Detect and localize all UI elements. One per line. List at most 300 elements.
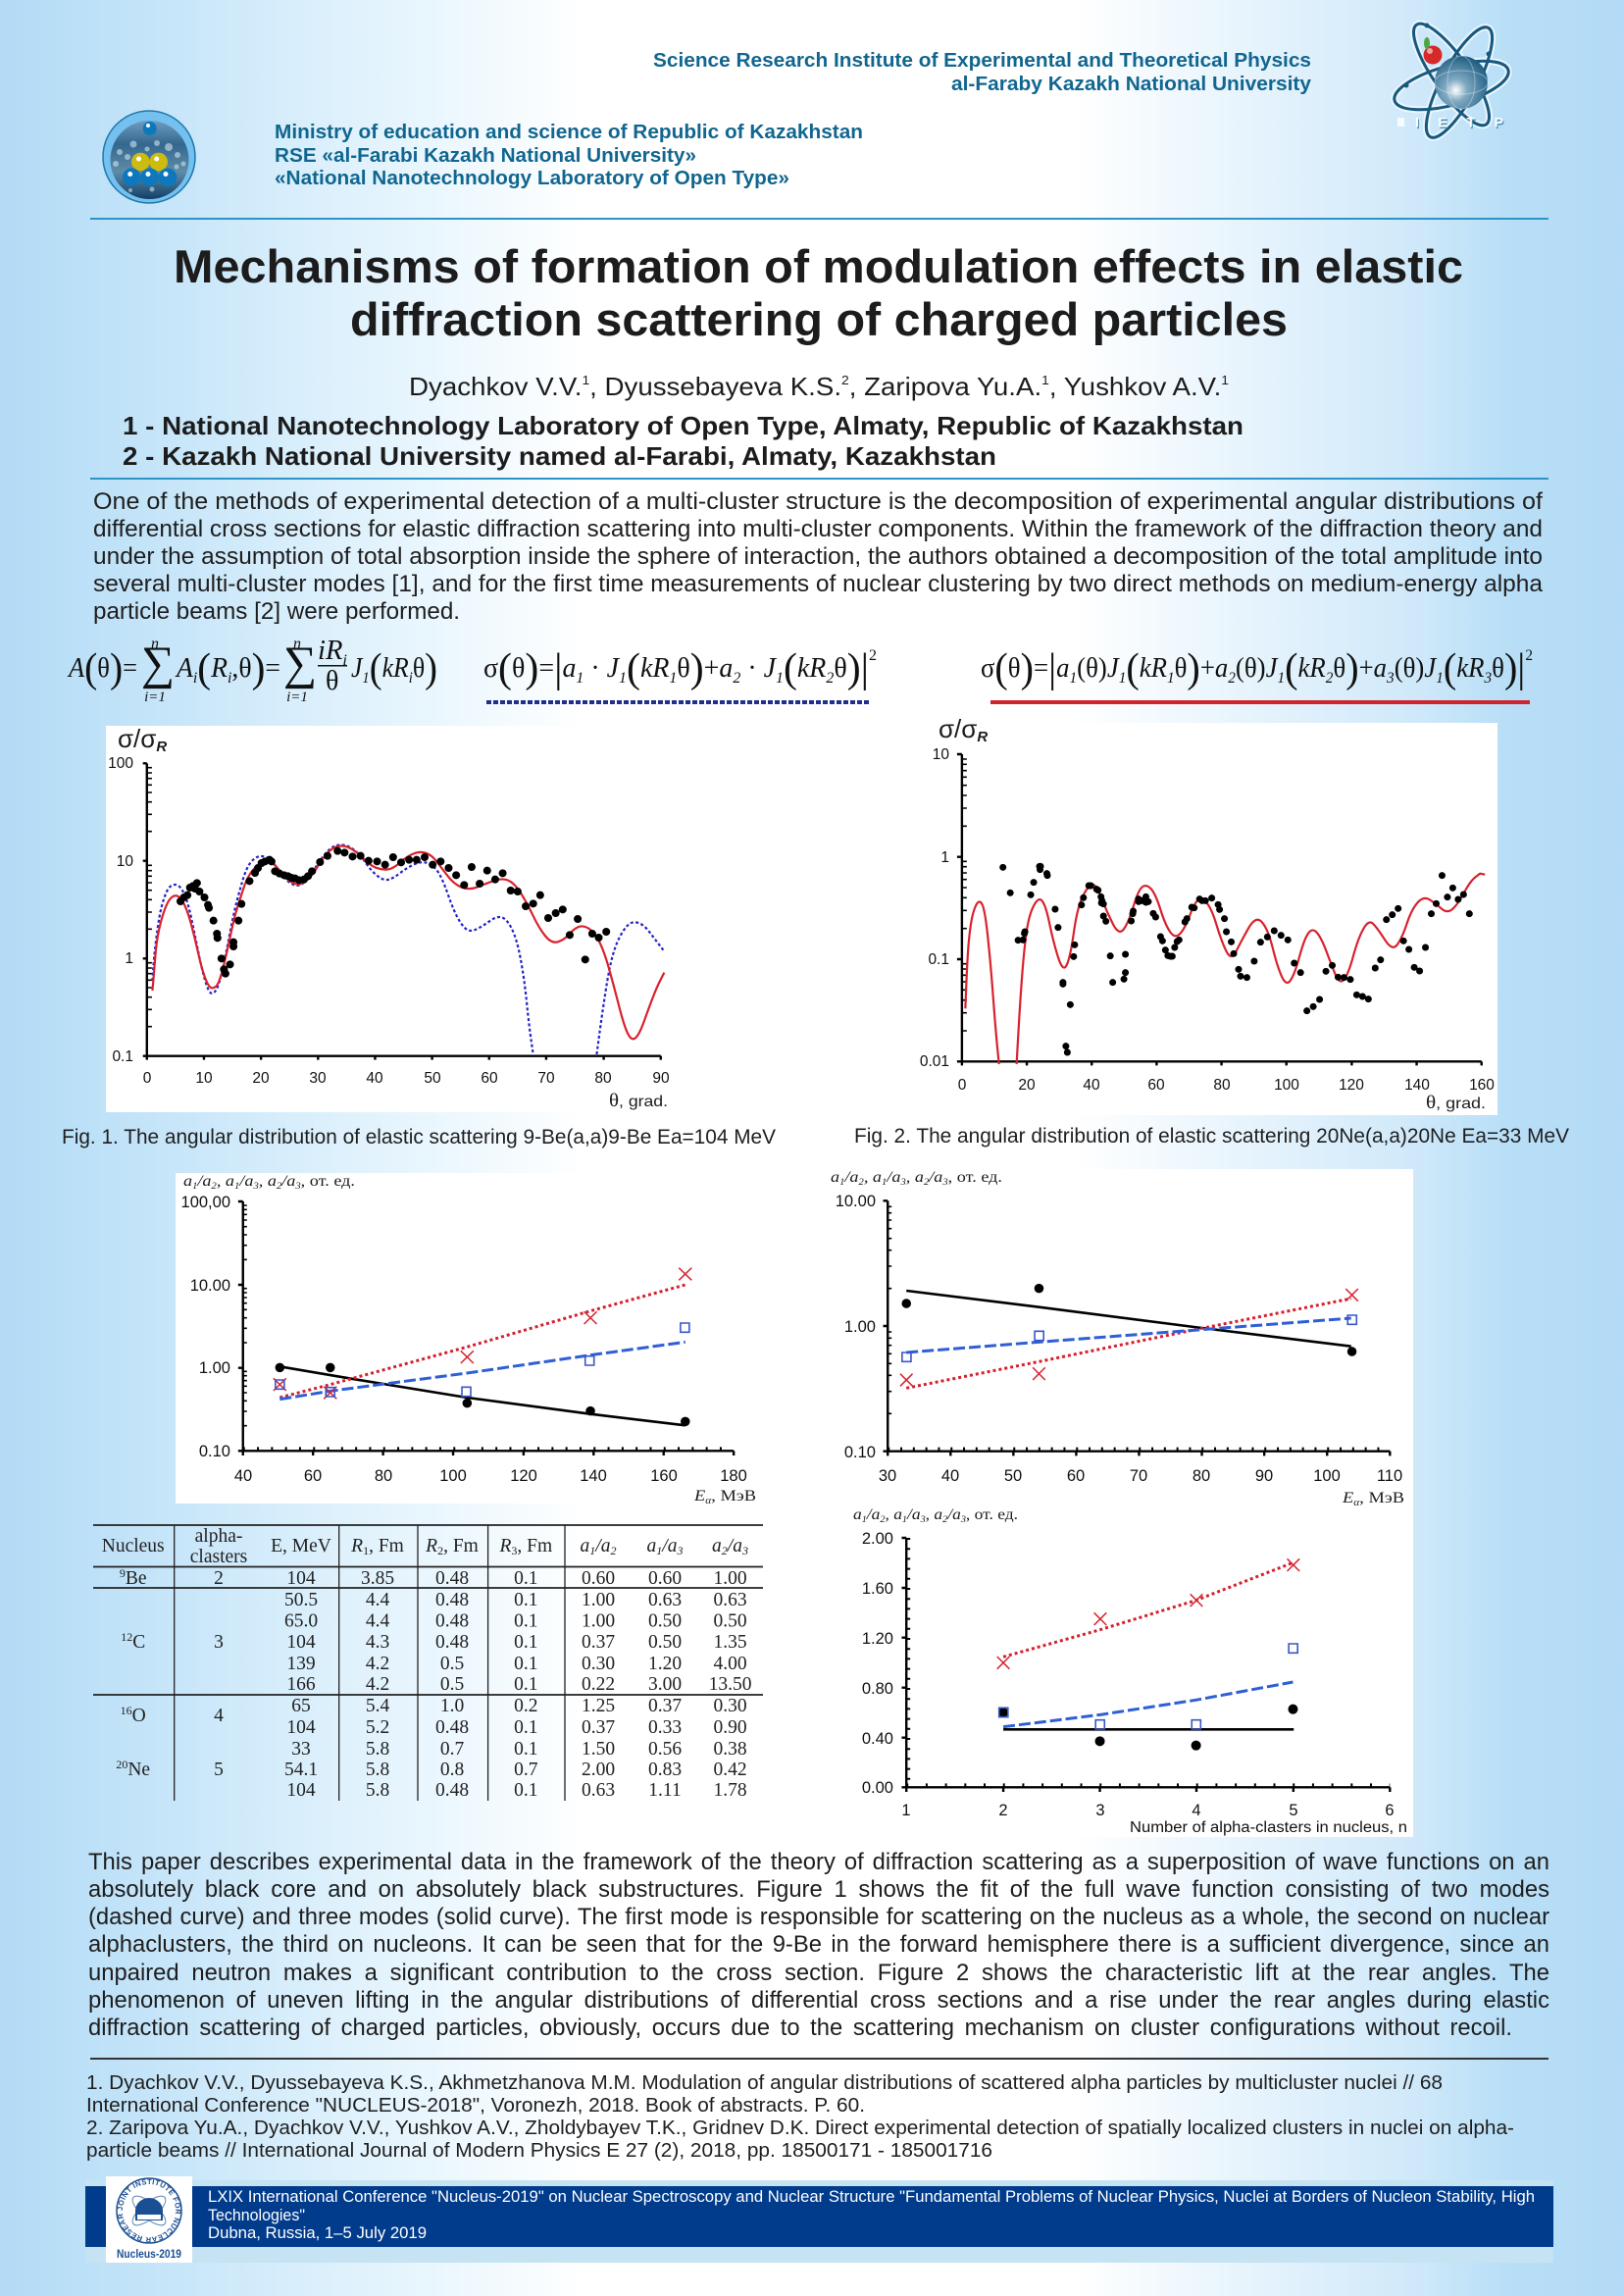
- intro paragraph: several multi-cluster modes [1], and for the first time measurements of nuclear clustering by two direct methods on medium-energy alpha: [93, 571, 1544, 597]
- table values: 0.30: [582, 1654, 615, 1674]
- chart: amplitude ratios vs number of alpha clusters: /a: [906, 1506, 921, 1523]
- table values: 0.50: [648, 1610, 682, 1632]
- formula: three-mode cross section: (θ): [1077, 653, 1107, 684]
- table values: 65: [291, 1696, 311, 1716]
- chart: figure 1 angular distribution 9-Be: θ, grad.: [609, 1091, 668, 1111]
- chart: amplitude ratios vs number of alpha clusters: 1: [901, 1802, 911, 1819]
- table header: alpha-: [195, 1526, 242, 1547]
- header: institute name: Science Research Institute of Experimental and Theoretical Physics: [653, 50, 1311, 72]
- chart: figure 2 angular distribution 20Ne: 0: [958, 1077, 967, 1094]
- table values: 1.00: [582, 1590, 615, 1610]
- formula: two-mode cross section: kR: [640, 653, 669, 684]
- discussion paragraph: diffraction scattering of charged particles, obviously, occurs due to the scattering mechanism on cluster configurations without recoil.: [88, 2015, 1512, 2041]
- caption: figure 1: Fig. 1. The angular distribution of elastic scattering 9-Be(a,a)9-Be Ea=104 MeV: [62, 1126, 776, 1148]
- formula: three-mode cross section: kR: [1140, 653, 1167, 684]
- header: institute name: [653, 50, 1312, 95]
- formula: two-mode cross section: a: [719, 653, 733, 684]
- chart: amplitude ratios vs energy, 12C: α: [705, 1496, 712, 1506]
- formula: three-mode cross section: 1: [1436, 670, 1444, 687]
- formula: three-mode cross section: 1: [1277, 670, 1285, 687]
- table header: 1: [656, 1544, 662, 1557]
- icon: Nucleus-2019 conference logo: [106, 2176, 192, 2263]
- table values: 4.4: [366, 1610, 389, 1632]
- chart: figure 1 angular distribution 9-Be: 10: [195, 1070, 213, 1087]
- table header: 3: [511, 1544, 517, 1557]
- formula: two-mode cross section: J: [607, 653, 621, 684]
- chart: amplitude ratios vs energy, 12C: 10.00: [190, 1277, 230, 1295]
- chart: amplitude ratios vs energy, 12C: , a: [259, 1173, 277, 1190]
- chart: amplitude ratios vs number of alpha clusters: a: [853, 1506, 861, 1523]
- formula: total amplitude: θ: [97, 653, 110, 684]
- formula: three-mode cross section: a: [1374, 653, 1387, 684]
- chart: amplitude ratios vs number of alpha clusters: /a: [866, 1506, 881, 1523]
- table nuclei labels: 4: [214, 1706, 224, 1726]
- chart: amplitude ratios vs energy, 12C: 140: [580, 1467, 607, 1485]
- intro paragraph: [93, 488, 1544, 625]
- chart: amplitude ratios vs energy, 20Ne: 90: [1255, 1467, 1273, 1485]
- intro paragraph: particle beams [2] were performed.: [93, 598, 460, 625]
- table values: 0.7: [440, 1739, 464, 1760]
- intro paragraph: differential cross sections for elastic diffraction scattering into multi-cluster components. Within the framework of the diffraction theory and: [93, 516, 1543, 542]
- discussion paragraph: phenomenon of uneven lifting in the angular distributions of differential cross sections and a rise under the rear angles during elastic: [88, 1987, 1549, 2014]
- formula: total amplitude: [67, 636, 437, 705]
- table header: 1: [589, 1544, 595, 1557]
- table values: 0.7: [514, 1760, 538, 1780]
- formula: total amplitude: kR: [382, 653, 409, 684]
- table values: 0.60: [582, 1568, 615, 1589]
- formula: two-mode cross section: 1: [669, 670, 677, 687]
- chart: amplitude ratios vs energy, 12C: 1.00: [199, 1359, 230, 1377]
- chart: amplitude ratios vs energy, 20Ne: 40: [941, 1467, 959, 1485]
- header: ministry and laboratory text: RSE «al-Farabi Kazakh National University»: [275, 145, 696, 167]
- table header: /a: [594, 1536, 611, 1556]
- chart: figure 1 angular distribution 9-Be: 20: [252, 1070, 270, 1087]
- chart: amplitude ratios vs number of alpha clusters: , от. ед.: [966, 1506, 1018, 1523]
- title: Mechanisms of formation of modulation effects in elastic: [174, 240, 1463, 292]
- chart: amplitude ratios vs energy, 20Ne: 2: [924, 1177, 930, 1187]
- chart: amplitude ratios vs energy, 20Ne: 110: [1377, 1467, 1402, 1485]
- intro paragraph: under the assumption of total absorption inside the sphere of interaction, the authors obtained a decomposition of the total amplitude into: [93, 543, 1543, 570]
- table values: 2.00: [582, 1760, 615, 1780]
- formula: three-mode cross section: σ: [981, 653, 994, 684]
- formula: three-mode cross section: 2: [1525, 647, 1533, 664]
- chart: amplitude ratios vs number of alpha clusters: 1.60: [862, 1580, 893, 1598]
- formula: three-mode cross section: 2: [1326, 670, 1333, 687]
- formula: three-mode cross section: a: [1215, 653, 1228, 684]
- chart: amplitude ratios vs number of alpha clusters: , a: [885, 1506, 902, 1523]
- formula: total amplitude: θ: [326, 666, 338, 696]
- icon: IETP atom logo: [1390, 15, 1513, 145]
- formula: three-mode cross section: ): [1345, 646, 1359, 691]
- references: particle beams // International Journal of Modern Physics E 27 (2), 2018, pp. 18500171 - 185001716: [86, 2140, 992, 2162]
- chart: amplitude ratios vs energy, 12C: /a: [280, 1173, 296, 1190]
- table header: E, MeV: [271, 1536, 331, 1556]
- table values: 0.63: [582, 1780, 615, 1801]
- authors: 2: [841, 373, 849, 387]
- formula: two-mode cross section: J: [764, 653, 778, 684]
- icon: Nucleus-2019 conference logo: Nucleus-2019: [117, 2247, 181, 2261]
- chart: amplitude ratios vs energy, 20Ne: /a: [886, 1169, 901, 1186]
- chart: figure 1 angular distribution 9-Be: 30: [309, 1070, 327, 1087]
- formula: three-mode cross section: a: [1056, 653, 1070, 684]
- chart: amplitude ratios vs number of alpha clusters: 2: [942, 1514, 948, 1524]
- authors: , Yushkov A.V.: [1049, 372, 1221, 401]
- chart: figure 2 angular distribution 20Ne: 0.1: [928, 951, 949, 968]
- chart: amplitude ratios vs energy, 20Ne: 1.00: [844, 1318, 876, 1336]
- table values: 0.5: [440, 1674, 464, 1695]
- formula: two-mode cross section: (: [627, 646, 640, 691]
- authors: 1: [1221, 373, 1229, 387]
- chart: amplitude ratios vs energy, 20Ne: a: [831, 1169, 838, 1186]
- table values: 4.00: [713, 1654, 747, 1674]
- table values: 139: [286, 1654, 316, 1674]
- chart: amplitude ratios vs number of alpha clusters: 0.80: [862, 1680, 893, 1698]
- footer conference text: [208, 2187, 1535, 2242]
- chart: amplitude ratios vs energy, 20Ne: 3: [899, 1177, 906, 1187]
- formula: three-mode cross section: 1: [1119, 670, 1126, 687]
- table values: 0.1: [514, 1590, 537, 1610]
- table values: 5.4: [366, 1696, 389, 1716]
- chart: amplitude ratios vs energy, 20Ne: /a: [928, 1169, 943, 1186]
- table nuclei labels: Ne: [127, 1760, 150, 1780]
- icon: IETP atom logo: IETP: [1416, 116, 1504, 131]
- table nuclei labels: [116, 1566, 224, 1780]
- table values: 1.00: [713, 1568, 747, 1589]
- table values: 104: [286, 1780, 316, 1801]
- formula: two-mode cross section: ): [690, 646, 704, 691]
- table values: 4.4: [366, 1590, 389, 1610]
- table header: /a: [727, 1536, 742, 1556]
- chart: amplitude ratios vs energy, 12C: /a: [196, 1173, 212, 1190]
- formula: two-mode cross section: (: [784, 646, 797, 691]
- table header: R: [350, 1536, 363, 1556]
- table header: 2: [610, 1544, 616, 1557]
- chart: amplitude ratios vs number of alpha clusters: 1.20: [862, 1630, 893, 1648]
- table values: 0.50: [713, 1610, 747, 1632]
- table nuclei labels: 20: [116, 1758, 127, 1771]
- chart: figure 1 angular distribution 9-Be: σ/σ: [118, 724, 156, 753]
- chart: figure 2 angular distribution 20Ne: 140: [1404, 1077, 1430, 1094]
- table values: 5.2: [366, 1717, 389, 1738]
- chart: amplitude ratios vs number of alpha clusters: 3: [1095, 1802, 1105, 1819]
- chart: figure 2 angular distribution 20Ne: R: [977, 729, 988, 745]
- table values: 0.1: [514, 1739, 537, 1760]
- chart: amplitude ratios vs energy, 20Ne: 70: [1130, 1467, 1147, 1485]
- formula: three-mode cross section: (θ): [1236, 653, 1266, 684]
- formula: three-mode cross section: ): [1187, 646, 1200, 691]
- chart: amplitude ratios vs number of alpha clusters: 3: [960, 1514, 966, 1524]
- table values: 0.48: [435, 1590, 469, 1610]
- chart: figure 2 angular distribution 20Ne: 10: [933, 746, 949, 763]
- chart: amplitude ratios vs number of alpha clusters: 1: [902, 1514, 907, 1524]
- footer conference text: Technologies": [208, 2206, 305, 2224]
- table values: 1.35: [713, 1632, 747, 1653]
- table values: 0.63: [713, 1590, 747, 1610]
- table values: 0.8: [440, 1760, 464, 1780]
- references: [86, 2072, 1514, 2162]
- table values: 5.8: [366, 1760, 389, 1780]
- formula: two-mode cross section: θ: [834, 653, 847, 684]
- formula: two-mode cross section: )|: [847, 646, 869, 691]
- formula: total amplitude: i: [409, 670, 413, 687]
- chart: amplitude ratios vs number of alpha clusters: 0.00: [862, 1779, 893, 1797]
- formula: three-mode cross section: (: [1444, 646, 1456, 691]
- formula: three-mode cross section: θ: [1008, 653, 1021, 684]
- chart: amplitude ratios vs energy, 20Ne: 50: [1004, 1467, 1022, 1485]
- table values: 0.1: [514, 1717, 537, 1738]
- table values: 0.30: [713, 1696, 747, 1716]
- footer conference text: LXIX International Conference "Nucleus-2019" on Nuclear Spectroscopy and Nuclear Structure "Fundamental Problems of Nuclear Physics, Nuclei at Borders of Nucleon Stability, High: [208, 2187, 1535, 2206]
- formula: total amplitude: 1: [362, 670, 370, 687]
- table nuclei labels: O: [132, 1706, 146, 1726]
- chart: amplitude ratios vs number of alpha clusters: 1: [862, 1514, 867, 1524]
- authors: 1: [582, 373, 589, 387]
- formula: total amplitude: R: [210, 653, 228, 684]
- formula: total amplitude: (: [197, 646, 211, 691]
- formula: total amplitude: (: [84, 646, 97, 691]
- chart: amplitude ratios vs energy, 20Ne: 100: [1313, 1467, 1341, 1485]
- formula: total amplitude: i: [193, 670, 197, 687]
- chart: amplitude ratios vs energy, 12C: 120: [510, 1467, 537, 1485]
- header: ministry and laboratory text: [275, 122, 863, 189]
- formula: total amplitude: ∑: [283, 638, 317, 689]
- table values: 0.50: [648, 1632, 682, 1653]
- chart: amplitude ratios vs energy, 12C: 2: [277, 1181, 282, 1191]
- formula: three-mode cross section: 3: [1484, 670, 1492, 687]
- table values: 13.50: [709, 1674, 751, 1695]
- references: 2. Zaripova Yu.A., Dyachkov V.V., Yushkov A.V., Zholdybayev T.K., Gridnev D.K. Direct experimental detection of spatially localized clusters in nuclei on alpha-: [86, 2117, 1514, 2139]
- table values: 166: [286, 1674, 316, 1695]
- table values: 1.25: [582, 1696, 615, 1716]
- chart: amplitude ratios vs energy, 20Ne: 60: [1067, 1467, 1085, 1485]
- table values: 0.38: [713, 1739, 747, 1760]
- chart: amplitude ratios vs energy, 20Ne: , МэВ: [1359, 1490, 1404, 1506]
- chart: amplitude ratios vs energy, 12C: , МэВ: [711, 1488, 756, 1505]
- chart: figure 2 angular distribution 20Ne: 1: [940, 849, 949, 866]
- table values: 0.48: [435, 1632, 469, 1653]
- discussion paragraph: [88, 1849, 1549, 2045]
- table values: 5.8: [366, 1780, 389, 1801]
- table nuclei labels: Be: [126, 1568, 147, 1589]
- formula: three-mode cross section: +: [1359, 653, 1374, 684]
- formula: total amplitude: n: [293, 636, 301, 652]
- formula: three-mode cross section: +: [1200, 653, 1215, 684]
- authors: , Dyussebayeva K.S.: [589, 372, 841, 401]
- table header: , Fm: [517, 1536, 552, 1556]
- formula: total amplitude: θ: [413, 653, 425, 684]
- affiliations: 2 - Kazakh National University named al-Farabi, Almaty, Kazakhstan: [123, 441, 996, 471]
- table values: 3.85: [361, 1568, 394, 1589]
- table values: 0.1: [514, 1632, 537, 1653]
- chart: amplitude ratios vs energy, 12C: 1: [192, 1181, 197, 1191]
- chart: amplitude ratios vs energy, 20Ne: [831, 1169, 1404, 1508]
- data table: [93, 1525, 763, 1801]
- chart: figure 1 angular distribution 9-Be: R: [156, 739, 167, 755]
- formula: total amplitude: i=1: [286, 689, 308, 705]
- formula: two-mode cross section: 2: [826, 670, 834, 687]
- chart: figure 1 angular distribution 9-Be: 100: [108, 755, 133, 772]
- table values: 0.37: [582, 1632, 615, 1653]
- chart: amplitude ratios vs energy, 20Ne: , a: [864, 1169, 882, 1186]
- chart: amplitude ratios vs energy, 12C: /a: [238, 1173, 254, 1190]
- formula: total amplitude: =: [123, 653, 137, 684]
- formula: two-mode cross section: (: [498, 646, 512, 691]
- table header: 3: [741, 1544, 748, 1557]
- chart: amplitude ratios vs number of alpha clusters: 3: [919, 1514, 926, 1524]
- chart: amplitude ratios vs energy, 12C: E: [693, 1488, 705, 1505]
- table header: /a: [661, 1536, 678, 1556]
- affiliations: 1 - National Nanotechnology Laboratory of Open Type, Almaty, Republic of Kazakhstan: [123, 411, 1243, 440]
- chart: amplitude ratios vs energy, 20Ne: 80: [1193, 1467, 1210, 1485]
- icon: IETP atom logo: IETP: [1415, 114, 1503, 129]
- formula: two-mode cross section: θ: [512, 653, 525, 684]
- icon: nanotechnology laboratory logo: [103, 111, 195, 203]
- formula: two-mode cross section: θ: [677, 653, 690, 684]
- chart: amplitude ratios vs energy, 20Ne: 2: [859, 1177, 864, 1187]
- formula: three-mode cross section: )|: [1504, 646, 1525, 691]
- table values: 0.90: [713, 1717, 747, 1738]
- table values: 0.56: [648, 1739, 682, 1760]
- discussion paragraph: unpaired neutron makes a significant contribution to the cross section. Figure 2 shows the characteristic lift at the rear angles. The: [88, 1960, 1549, 1986]
- table values: 104: [286, 1568, 316, 1589]
- formula: total amplitude: ∑: [141, 638, 175, 689]
- formula: three-mode cross section: J: [1107, 653, 1120, 684]
- chart: figure 2 angular distribution 20Ne: 40: [1083, 1077, 1100, 1094]
- formula: two-mode cross section: 2: [733, 670, 740, 687]
- table values: 65.0: [284, 1610, 318, 1632]
- formula: three-mode cross section: 1: [1167, 670, 1175, 687]
- formula: three-mode cross section: kR: [1297, 653, 1326, 684]
- chart: amplitude ratios vs number of alpha clusters: , a: [926, 1506, 942, 1523]
- chart: amplitude ratios vs energy, 20Ne: E: [1342, 1490, 1353, 1506]
- table header: , Fm: [369, 1536, 404, 1556]
- chart: amplitude ratios vs energy, 20Ne: , a: [906, 1169, 924, 1186]
- table header: a: [647, 1536, 657, 1556]
- chart: figure 1 angular distribution 9-Be: [106, 724, 694, 1112]
- chart: figure 1 angular distribution 9-Be: 90: [652, 1070, 670, 1087]
- formula: three-mode cross section: (: [994, 646, 1008, 691]
- references: International Conference "NUCLEUS-2018", Voronezh, 2018. Book of abstracts. P. 60.: [86, 2095, 865, 2117]
- header: ministry and laboratory text: «National Nanotechnology Laboratory of Open Type»: [275, 168, 789, 189]
- formula: three-mode cross section: (θ): [1395, 653, 1424, 684]
- formula: three-mode cross section: 3: [1386, 670, 1395, 687]
- authors: , Zaripova Yu.A.: [849, 372, 1041, 401]
- table values: 50.5: [284, 1590, 318, 1610]
- chart: amplitude ratios vs energy, 20Ne: 30: [879, 1467, 896, 1485]
- chart: amplitude ratios vs energy, 20Ne: 10.00: [836, 1193, 876, 1210]
- chart: amplitude ratios vs energy, 12C: 2: [212, 1181, 217, 1191]
- formula: total amplitude: i: [342, 652, 347, 669]
- table nuclei labels: 3: [214, 1632, 224, 1653]
- title: [174, 240, 1463, 345]
- table values: 0.33: [648, 1717, 682, 1738]
- table values: 0.83: [648, 1760, 682, 1780]
- formula: three-mode cross section: ): [1021, 646, 1034, 691]
- formula: three-mode cross section: [981, 646, 1533, 704]
- formula: three-mode cross section: J: [1266, 653, 1279, 684]
- table nuclei labels: 16: [121, 1704, 132, 1717]
- chart: amplitude ratios vs energy, 12C: 1: [234, 1181, 239, 1191]
- table values: [284, 1568, 751, 1801]
- table values: 5.8: [366, 1739, 389, 1760]
- table values: 104: [286, 1632, 316, 1653]
- table values: 1.78: [713, 1780, 747, 1801]
- chart: figure 1 angular distribution 9-Be: 40: [366, 1070, 383, 1087]
- table header: R: [498, 1536, 511, 1556]
- formula: total amplitude: ): [110, 646, 123, 691]
- chart: figure 1 angular distribution 9-Be: 60: [481, 1070, 498, 1087]
- table values: 0.48: [435, 1717, 469, 1738]
- chart: figure 2 angular distribution 20Ne: 80: [1213, 1077, 1231, 1094]
- table values: 33: [291, 1739, 311, 1760]
- chart: figure 1 angular distribution 9-Be: 0: [143, 1070, 152, 1087]
- chart: amplitude ratios vs energy, 12C: a: [183, 1173, 191, 1190]
- discussion paragraph: This paper describes experimental data in the framework of the theory of diffraction scattering as a superposition of wave functions on an: [88, 1849, 1549, 1875]
- formula: three-mode cross section: (: [1126, 646, 1140, 691]
- chart: amplitude ratios vs number of alpha clusters: 2.00: [862, 1530, 893, 1548]
- table values: 1.0: [440, 1696, 464, 1716]
- table values: 0.48: [435, 1610, 469, 1632]
- table values: 4.2: [366, 1674, 389, 1695]
- table header: a: [581, 1536, 590, 1556]
- chart: figure 1 angular distribution 9-Be: 1: [125, 950, 133, 967]
- formula: three-mode cross section: (: [1285, 646, 1297, 691]
- chart: figure 2 angular distribution 20Ne: 0.01: [920, 1053, 949, 1070]
- formula: total amplitude: A: [69, 653, 85, 684]
- formula: three-mode cross section: kR: [1456, 653, 1484, 684]
- chart: amplitude ratios vs number of alpha clusters: 6: [1385, 1802, 1395, 1819]
- table header: 2: [722, 1544, 728, 1557]
- references: 1. Dyachkov V.V., Dyussebayeva K.S., Akhmetzhanova M.M. Modulation of angular distributions of scattered alpha particles by multicluster nuclei // 68: [86, 2072, 1443, 2094]
- formula: total amplitude: iR: [318, 636, 342, 666]
- table header: 2: [437, 1544, 443, 1557]
- chart: figure 2 angular distribution 20Ne: σ/σ: [939, 714, 977, 743]
- formula: two-mode cross section: 1: [576, 670, 584, 687]
- table header: , Fm: [443, 1536, 479, 1556]
- chart: amplitude ratios vs number of alpha clusters: 2: [998, 1802, 1008, 1819]
- formula: two-mode cross section: ): [525, 646, 538, 691]
- chart: amplitude ratios vs energy, 20Ne: α: [1353, 1498, 1360, 1508]
- chart: amplitude ratios vs energy, 12C: 80: [375, 1467, 392, 1485]
- caption: figure 2: Fig. 2. The angular distribution of elastic scattering 20Ne(a,a)20Ne Ea=33 MeV: [854, 1125, 1569, 1148]
- formula: total amplitude: (: [370, 646, 382, 691]
- intro paragraph: One of the methods of experimental detection of a multi-cluster structure is the decomposition of experimental angular distributions of: [93, 488, 1543, 515]
- chart: amplitude ratios vs number of alpha clusters: 4: [1192, 1802, 1201, 1819]
- title: diffraction scattering of charged particles: [350, 293, 1288, 345]
- table values: 0.42: [713, 1760, 747, 1780]
- chart: figure 2 angular distribution 20Ne: θ, grad.: [1426, 1093, 1486, 1113]
- chart: amplitude ratios vs number of alpha clusters: 2: [880, 1514, 886, 1524]
- chart: amplitude ratios vs energy, 12C: 100: [439, 1467, 467, 1485]
- table values: 0.48: [435, 1780, 469, 1801]
- chart: figure 2 angular distribution 20Ne: 20: [1018, 1077, 1036, 1094]
- table values: 0.37: [582, 1717, 615, 1738]
- table values: 0.63: [648, 1590, 682, 1610]
- table nuclei labels: 12: [121, 1630, 132, 1644]
- table values: 0.37: [648, 1696, 682, 1716]
- formula: two-mode cross section: 2: [869, 647, 877, 664]
- table values: 0.1: [514, 1654, 537, 1674]
- table values: 0.5: [440, 1654, 464, 1674]
- formula: two-mode cross section: a: [562, 653, 576, 684]
- affiliations: [123, 411, 1243, 471]
- chart: amplitude ratios vs energy, 12C: 180: [720, 1467, 747, 1485]
- formula: three-mode cross section: θ: [1175, 653, 1187, 684]
- formula: two-mode cross section: ·: [584, 653, 607, 684]
- table header: 1: [363, 1544, 369, 1557]
- formula: three-mode cross section: 1: [1070, 670, 1077, 687]
- chart: figure 1 angular distribution 9-Be: 70: [537, 1070, 555, 1087]
